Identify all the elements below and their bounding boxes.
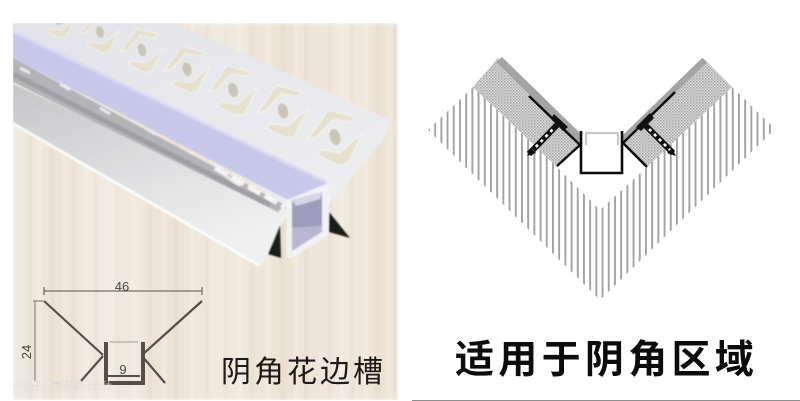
aluminium profile [13,2,391,267]
label 46: 46 [115,279,129,294]
bottom edge line [412,400,800,401]
lower flange [13,84,290,266]
dimension drawing [19,279,202,383]
wall hatch [428,87,775,300]
plaster mesh right [623,58,732,167]
panel: product photo on wood background [13,2,398,400]
wood background [13,23,398,400]
black profile lines [529,92,675,173]
caption: left panel: 阴角花边槽 [221,356,386,389]
caption: right panel: 适用于阴角区域 [455,339,758,382]
screw right [636,113,676,156]
black wing tips [268,225,281,258]
grey finish layer [496,57,580,143]
flower cutouts [46,23,360,164]
label 9: 9 [119,362,127,377]
lavender diffuser strip [13,30,327,200]
watermark: 中以品台灵明照明设计 [12,379,112,392]
upper flange [13,23,391,205]
grey rail with holes [13,58,285,212]
channel end [286,183,330,258]
label 24: 24 [19,345,34,359]
diffuser outline [585,133,618,145]
corner installation diagram [428,57,775,300]
plaster mesh left [473,58,580,167]
screw left [527,114,568,156]
